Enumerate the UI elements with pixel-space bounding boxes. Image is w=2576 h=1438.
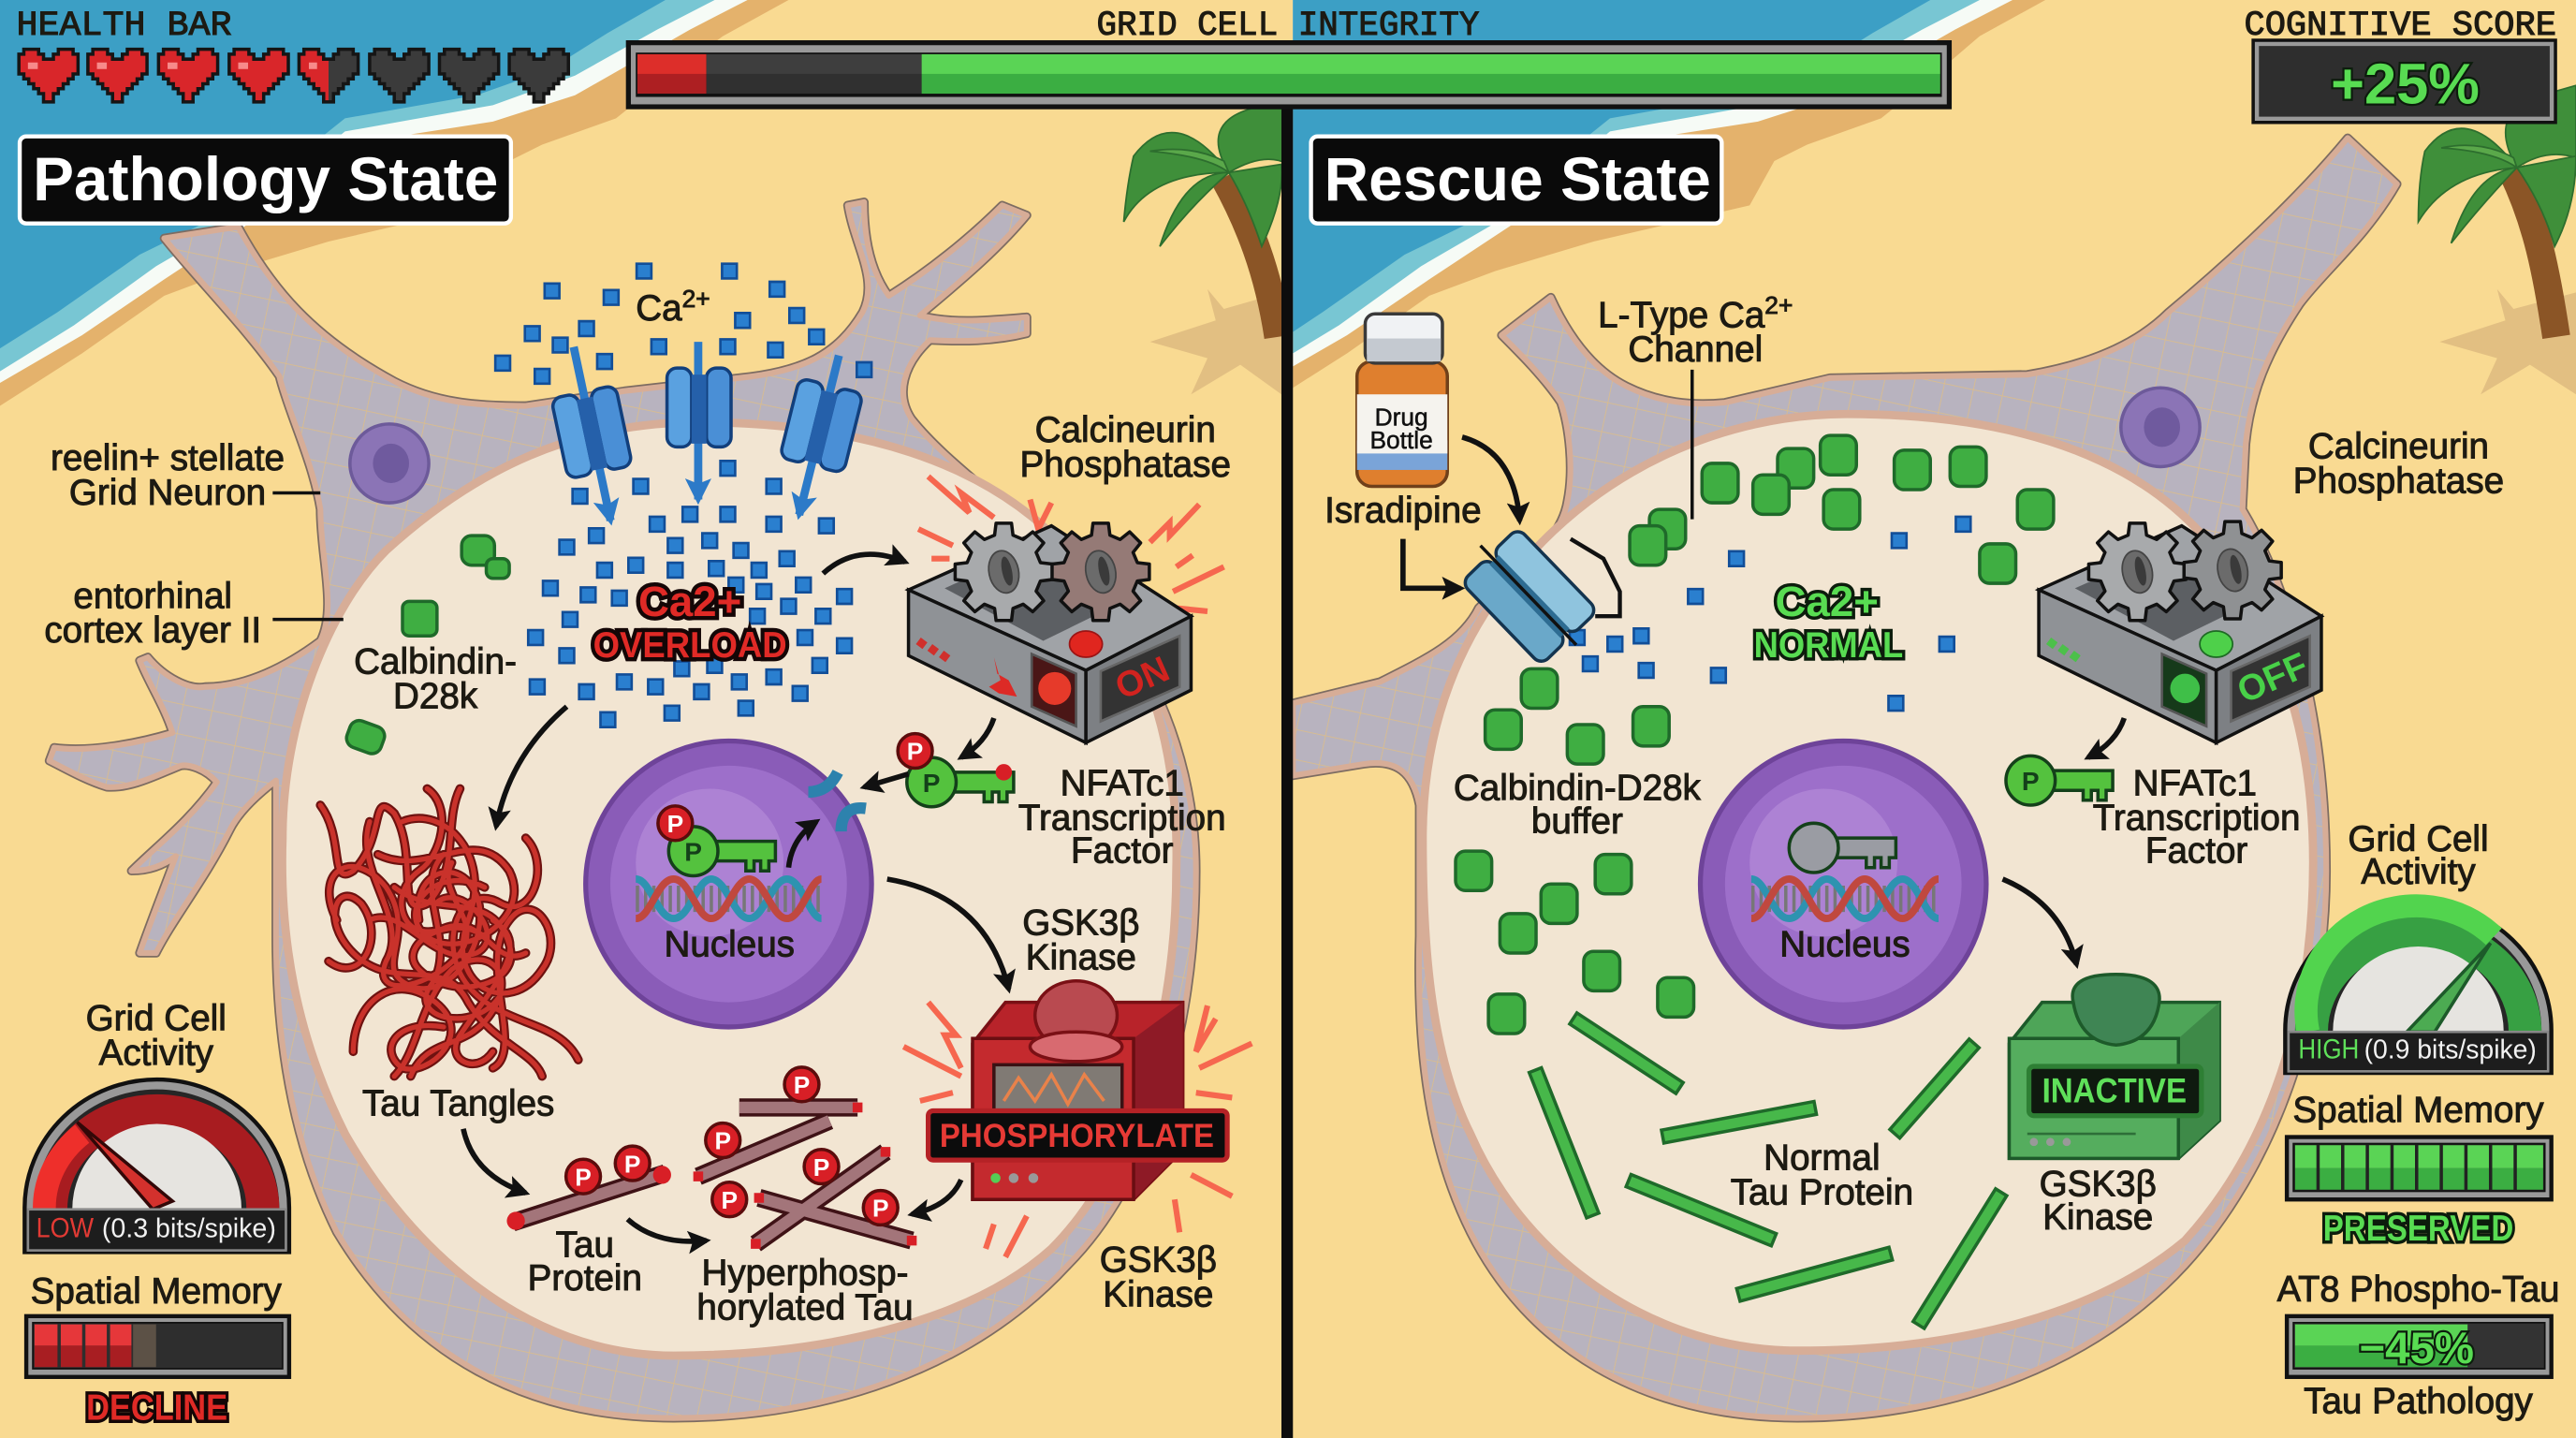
label: NFATc1: Transcription	[1018, 798, 1226, 838]
gear grey	[955, 523, 1052, 621]
label: Spatial Memory	[31, 1271, 283, 1312]
arrow: tau to hyperphosphorylated	[627, 1219, 707, 1241]
label: calcineurin phosphatase: Calcineurin	[1035, 410, 1216, 450]
NFAT key with phosphate: cytoplasm: P	[923, 769, 941, 798]
palm tree: left	[1123, 109, 1288, 337]
label: NFATc1: Factor	[1071, 830, 1174, 871]
label: GSK3β kinase rescue: Kinase	[2042, 1197, 2153, 1238]
label: reelin+ stellate grid neuron: reelin+ stellate	[51, 438, 285, 478]
gauge label: Activity	[2361, 852, 2476, 892]
grid cell integrity bar	[628, 7, 1949, 107]
gauge label: Grid Cell	[86, 998, 227, 1038]
nucleus: pathology	[586, 741, 871, 1027]
neuron membrane and dendrites	[1293, 138, 2397, 1418]
label: L-type channel: 2+	[1764, 291, 1793, 319]
NFAT key: unphosphorylated: P	[2022, 767, 2040, 796]
inactive banner: INACTIVE	[2042, 1072, 2187, 1110]
label: Ca2+ normal	[1754, 578, 1903, 666]
low readout	[28, 1210, 285, 1251]
score label: COGNITIVE SCORE	[2244, 7, 2556, 46]
arrow: nucleus to inactive kinase	[2002, 879, 2076, 964]
calcineurin machine: on: ON	[1109, 649, 1176, 708]
label: GSK3β kinase upper: Kinase	[1026, 938, 1136, 978]
label: reelin+ stellate grid neuron: Grid Neuron	[69, 473, 266, 513]
spatial memory: preserved	[2287, 1091, 2552, 1249]
arrow: overload to tangles	[496, 707, 567, 827]
hyperphosphorylated tau rods	[694, 1067, 916, 1249]
label: L-type channel: L-Type Ca	[1598, 295, 1764, 335]
tau tangles	[320, 788, 578, 1077]
right ocean and beach	[1293, 0, 2045, 388]
needle	[2407, 943, 2491, 1032]
arrow: kinase to hyperphosphorylated	[912, 1180, 961, 1214]
arrow: calcineurin to NFAT	[961, 718, 994, 757]
label: tau protein: Protein	[528, 1258, 642, 1299]
arrow: tangles to tau	[463, 1129, 526, 1193]
label: tau protein: Tau	[556, 1225, 614, 1266]
label: calbindin-D28k buffer: buffer	[1531, 801, 1623, 842]
GSK3β kinase machine: inactive	[2009, 975, 2219, 1158]
drug bottle: Bottle	[1369, 426, 1433, 454]
normal tau protein rods	[1538, 1022, 1998, 1319]
tau bar	[2287, 1316, 2552, 1377]
hearts	[19, 50, 568, 102]
label: GSK3β kinase rescue	[2040, 1165, 2157, 1238]
label: normal tau protein: Normal	[1764, 1138, 1881, 1179]
label: calcineurin phosphatase: Phosphatase	[1020, 445, 1231, 485]
label: hyperphosphorylated tau: horylated Tau	[696, 1287, 914, 1328]
gauge dial	[2285, 902, 2552, 1073]
NFAT key: unphosphorylated	[2006, 756, 2113, 805]
low readout: LOW	[37, 1213, 95, 1244]
spatial memory: decline	[26, 1271, 289, 1428]
palm shadow: right	[2439, 289, 2576, 394]
label: GSK3β kinase upper	[1022, 903, 1139, 978]
calbindin buffer blobs: rescue	[1456, 435, 2054, 1034]
arrow: nucleus to kinase	[887, 879, 1009, 990]
label: GSK3β kinase upper: GSK3β	[1022, 903, 1139, 944]
inactive grey key	[1789, 823, 1895, 873]
arrow: NFAT to pore	[864, 774, 909, 787]
label: hyperphosphorylated tau	[696, 1253, 914, 1328]
neuron membrane and dendrites	[50, 202, 1196, 1418]
calbindin blobs: pathology	[344, 536, 509, 756]
GSK3β kinase machine: active	[929, 981, 1227, 1199]
label: entorhinal cortex layer II	[44, 576, 344, 651]
label: NFATc1 rescue: NFATc1	[2133, 763, 2257, 803]
nuclear pore	[809, 772, 866, 831]
drug bottle: Drug	[1375, 404, 1428, 432]
gear left	[2088, 523, 2186, 621]
heading: rescue state: Rescue State	[1325, 144, 1711, 213]
calcium ions: rescue	[1570, 517, 1970, 711]
label: NFATc1 rescue: Transcription	[2093, 798, 2300, 838]
decline label: DECLINE	[86, 1387, 227, 1428]
panel: pathology state neuron	[50, 202, 1196, 1418]
label: GSK3β kinase lower	[1100, 1240, 1217, 1314]
label: entorhinal cortex layer II: cortex layer II	[44, 610, 261, 651]
calcineurin machine: on	[909, 523, 1191, 742]
panel: rescue state neuron	[1293, 138, 2397, 1418]
label: calbindin-D28k: Calbindin-	[354, 642, 517, 682]
calcineurin machine: off	[2039, 521, 2321, 742]
arrow: overload to calcineurin	[823, 554, 905, 574]
label: calcineurin phosphatase rescue	[2293, 427, 2504, 502]
integrity track	[628, 43, 1949, 107]
NFAT key in nucleus	[658, 806, 775, 875]
label: nucleus: Nucleus	[665, 924, 795, 964]
NFAT key in nucleus: P	[684, 838, 702, 867]
NFAT key with phosphate: cytoplasm	[898, 734, 1014, 807]
label: Spatial Memory	[2292, 1091, 2544, 1131]
label: GSK3β kinase lower: Kinase	[1103, 1274, 1213, 1314]
label: NFATc1 rescue	[2093, 763, 2300, 871]
palm shadow: left	[1150, 289, 1281, 394]
label: hyperphosphorylated tau: Hyperphosp-	[701, 1253, 909, 1293]
label: NFATc1	[1018, 763, 1226, 871]
needle	[77, 1123, 172, 1210]
score box	[2253, 40, 2555, 123]
grid cell activity gauge: low	[24, 998, 289, 1252]
label: calbindin-D28k buffer: Calbindin-D28k	[1454, 769, 1702, 809]
cell cytoplasm	[1423, 414, 2313, 1351]
centre divider	[1281, 98, 1293, 1438]
integrity label: GRID CELL INTEGRITY	[1097, 7, 1479, 46]
gauge label: Activity	[99, 1033, 214, 1073]
label: Ca2+ overload	[593, 578, 787, 666]
blocked bracket	[1571, 539, 1620, 616]
label: GSK3β kinase lower: GSK3β	[1100, 1240, 1217, 1280]
label: calcineurin phosphatase	[1020, 410, 1231, 485]
calcineurin machine: off: OFF	[2232, 645, 2314, 712]
left ocean and beach	[0, 0, 788, 406]
channel right	[768, 347, 871, 522]
label: nucleus: Nucleus	[1779, 924, 1910, 964]
label: normal tau protein: Tau Protein	[1731, 1172, 1913, 1212]
arrow: calcineurin off to NFAT	[2088, 718, 2124, 757]
cell cytoplasm	[282, 422, 1177, 1356]
DNA helix	[636, 879, 822, 918]
label: Ca2+ overload: OVERLOAD	[593, 625, 787, 666]
label: NFATc1: NFATc1	[1061, 763, 1184, 803]
palm tree: right	[2419, 85, 2576, 337]
memory bar	[2287, 1137, 2552, 1199]
heading: pathology state: Pathology State	[33, 144, 498, 213]
gauge label: Grid Cell	[2348, 819, 2489, 859]
gauge label	[2348, 819, 2489, 892]
gear rust	[1052, 523, 1149, 621]
label: AT8 Phospho-Tau	[2277, 1269, 2559, 1310]
health bar	[17, 7, 568, 102]
label: GSK3β kinase rescue: GSK3β	[2040, 1165, 2157, 1205]
soma purple organelle	[350, 424, 429, 503]
sparks: kinase	[903, 1003, 1251, 1257]
high readout: HIGH	[2298, 1034, 2359, 1064]
phosphorylate banner: PHOSPHORYLATE	[940, 1118, 1214, 1154]
label: entorhinal cortex layer II: entorhinal	[73, 576, 232, 616]
low readout: (0.3 bits/spike)	[102, 1214, 276, 1244]
cognitive score	[2244, 7, 2556, 123]
DNA helix	[1751, 879, 1939, 918]
AT8 phospho-tau	[2277, 1269, 2559, 1421]
health bar label: HEALTH BAR	[17, 7, 231, 46]
label: Ca2+ overload: Ca2+	[638, 578, 741, 625]
L-type channel blocked	[1452, 519, 1620, 672]
channel centre	[667, 342, 731, 500]
arrow: key to pore	[788, 822, 816, 868]
label: Ca2+ normal: NORMAL	[1754, 625, 1903, 666]
label: calbindin-D28k buffer	[1454, 769, 1702, 842]
label: Ca2+: 2+	[682, 285, 710, 313]
grid cell activity gauge: high	[2285, 819, 2552, 1073]
high readout: (0.9 bits/spike)	[2364, 1034, 2537, 1064]
channel left	[542, 340, 643, 527]
label: tau tangles: Tau Tangles	[362, 1084, 554, 1124]
L-type channels open: pathology	[542, 340, 871, 527]
label: calbindin-D28k	[354, 642, 517, 716]
soma purple organelle	[2121, 388, 2200, 466]
nucleus: rescue	[1701, 741, 1986, 1027]
drug bottle	[1357, 314, 1447, 487]
preserved label: PRESERVED	[2323, 1209, 2513, 1249]
score box: +25%	[2331, 52, 2480, 117]
gauge label	[86, 998, 227, 1073]
label: NFATc1 rescue: Factor	[2145, 830, 2247, 871]
arrow: bottle to channel	[1462, 437, 1519, 521]
tau protein rod with phosphates	[506, 1146, 671, 1230]
label: Ca2+: Ca	[636, 288, 682, 329]
memory bar	[26, 1316, 289, 1377]
gear right	[2184, 521, 2281, 619]
label: isradipine: Isradipine	[1325, 491, 1482, 531]
calcium ions: pathology	[495, 264, 871, 727]
high readout	[2289, 1032, 2548, 1071]
label: calcineurin phosphatase rescue: Calcineurin	[2308, 427, 2489, 467]
arrow: isradipine to channel	[1403, 539, 1460, 588]
label: L-type channel: Channel	[1628, 330, 1763, 370]
label: calcineurin phosphatase rescue: Phosphatase	[2293, 462, 2504, 502]
label: normal tau protein	[1731, 1138, 1913, 1212]
label: Tau Pathology	[2304, 1381, 2534, 1421]
label: calbindin-D28k: D28k	[393, 676, 478, 716]
sparks: calcineurin on	[918, 477, 1224, 611]
label: reelin+ stellate grid neuron	[51, 438, 320, 513]
gauge dial	[24, 1079, 289, 1252]
tau bar: −45%	[2360, 1324, 2474, 1373]
label: tau protein	[528, 1225, 642, 1299]
label: Ca2+ normal: Ca2+	[1776, 578, 1879, 625]
label: L-type channel	[1598, 291, 1793, 520]
